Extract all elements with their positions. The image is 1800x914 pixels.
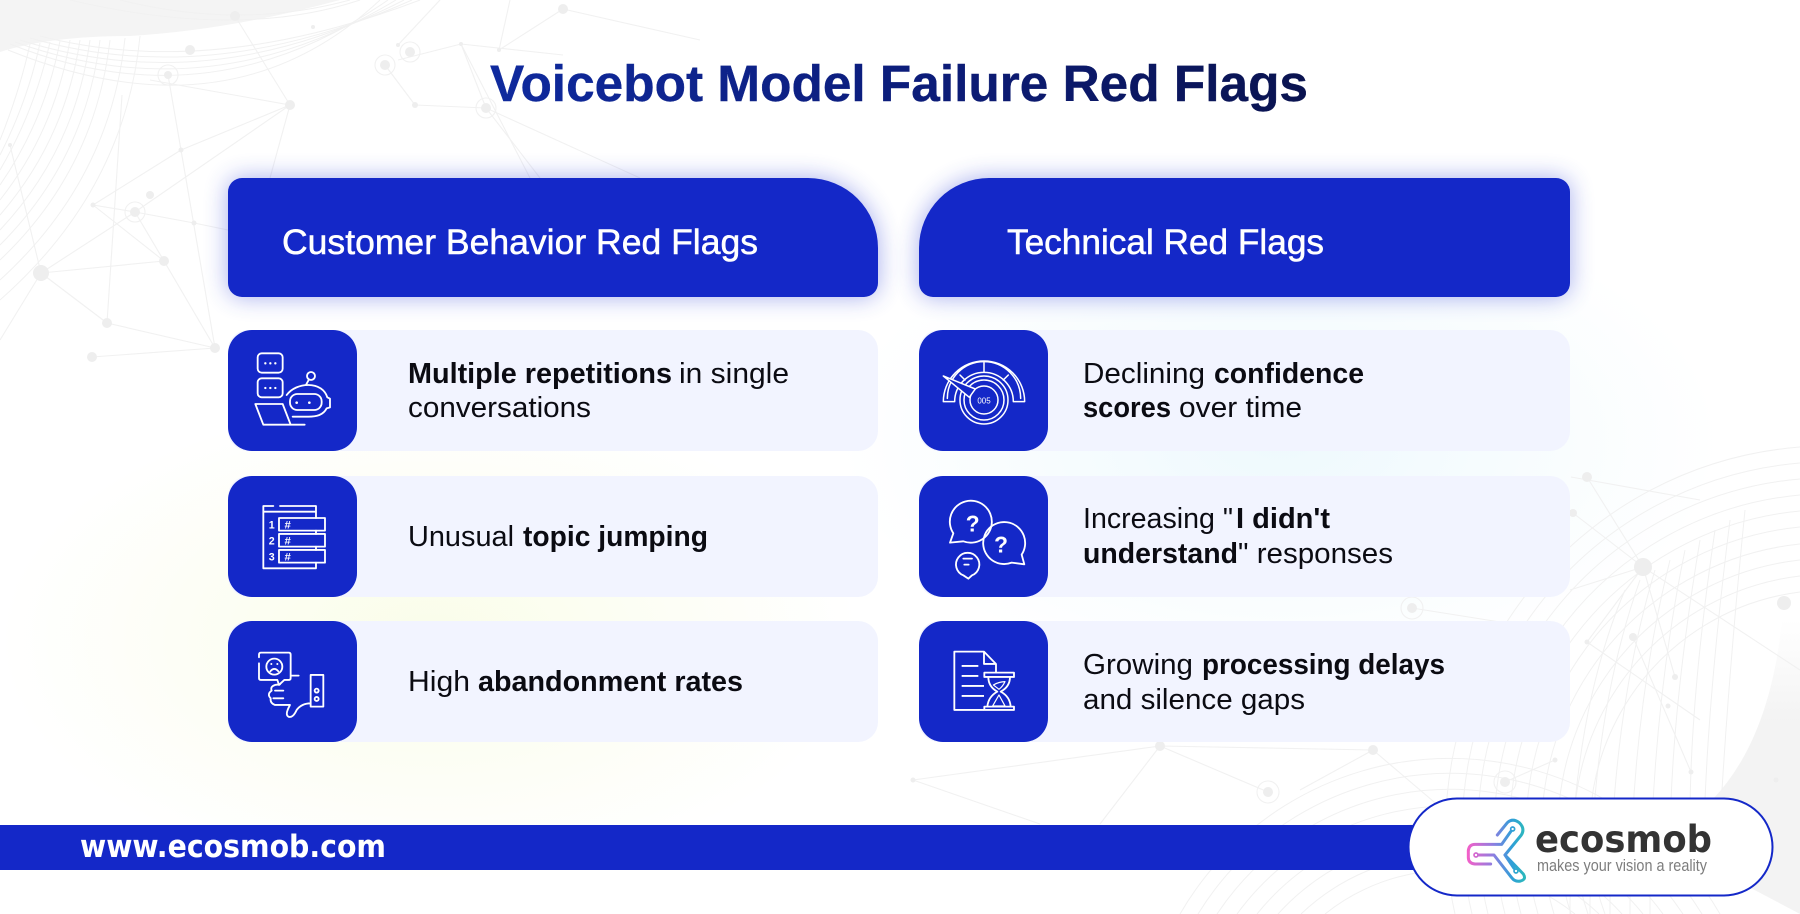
row: topic jumping	[228, 476, 878, 597]
text: confidence scores: scores	[1083, 392, 1171, 424]
logo pill	[1408, 798, 1772, 896]
header: customer behavior	[228, 178, 878, 297]
text: didn't understand: Increasing "	[1083, 503, 1233, 535]
logo wordmark: ecosmob	[1535, 818, 1712, 861]
text: multiple repetitions	[408, 358, 789, 424]
text: processing delays: Growing	[1083, 649, 1193, 681]
icon: numbered list	[263, 506, 325, 568]
text: topic jumping: Unusual	[408, 521, 514, 553]
row: confidence scores	[919, 330, 1570, 451]
text: confidence scores	[1083, 358, 1364, 424]
footer bar	[0, 825, 1420, 870]
text: didn't understand	[1083, 503, 1393, 570]
icon: gauge meter: 005	[977, 396, 991, 405]
text: didn't understand: understand	[1083, 538, 1238, 570]
text: multiple repetitions: in single	[679, 358, 789, 390]
header: customer behavior: Customer Behavior Red Flags	[282, 223, 758, 262]
text: abandonment rates: abandonment rates	[478, 666, 743, 698]
icon: numbered list: 3	[269, 552, 275, 564]
website url: www.ecosmob.com	[80, 829, 386, 865]
icon: numbered list: #	[285, 551, 292, 563]
text: multiple repetitions: Multiple repetitions	[408, 358, 672, 390]
icon: chatbot with laptop	[255, 353, 330, 425]
text: topic jumping: topic jumping	[523, 521, 708, 553]
row: processing delays	[919, 621, 1570, 742]
icon: question speech bubbles	[950, 501, 1025, 579]
row: didn't understand	[919, 476, 1570, 597]
icon: numbered list: #	[285, 535, 292, 547]
icon: document with hourglass	[954, 652, 1014, 710]
text: confidence scores: Declining	[1083, 358, 1205, 390]
icon: gauge meter	[943, 361, 1025, 424]
text: multiple repetitions: conversations	[408, 392, 591, 424]
header: technical	[919, 178, 1570, 297]
title: Voicebot Model Failure Red Flags	[490, 55, 1308, 112]
icon: sad face thumbs down	[259, 653, 323, 717]
header: technical: Technical Red Flags	[1007, 223, 1324, 262]
panel: customer behavior red flags	[228, 178, 878, 742]
text: confidence scores: over time	[1179, 392, 1302, 424]
icon: ecosmob logo mark	[1468, 820, 1525, 881]
row: abandonment rates	[228, 621, 878, 742]
text: didn't understand: I didn't	[1236, 503, 1330, 535]
icon: numbered list: 1	[269, 520, 275, 532]
panel: technical red flags	[919, 178, 1570, 742]
text: processing delays: and silence gaps	[1083, 684, 1305, 716]
icon: question speech bubbles: ?	[994, 532, 1008, 558]
text: confidence scores: confidence	[1214, 358, 1364, 390]
row: multiple repetitions	[228, 330, 878, 451]
text: processing delays	[1083, 649, 1445, 716]
logo tagline: makes your vision a reality	[1537, 856, 1707, 875]
icon: question speech bubbles: ?	[966, 510, 980, 536]
icon: numbered list: #	[285, 519, 292, 531]
text: didn't understand: " responses	[1238, 538, 1393, 570]
icon: numbered list: 2	[269, 536, 275, 548]
text: abandonment rates: High	[408, 666, 470, 698]
text: processing delays: processing delays	[1202, 649, 1445, 681]
